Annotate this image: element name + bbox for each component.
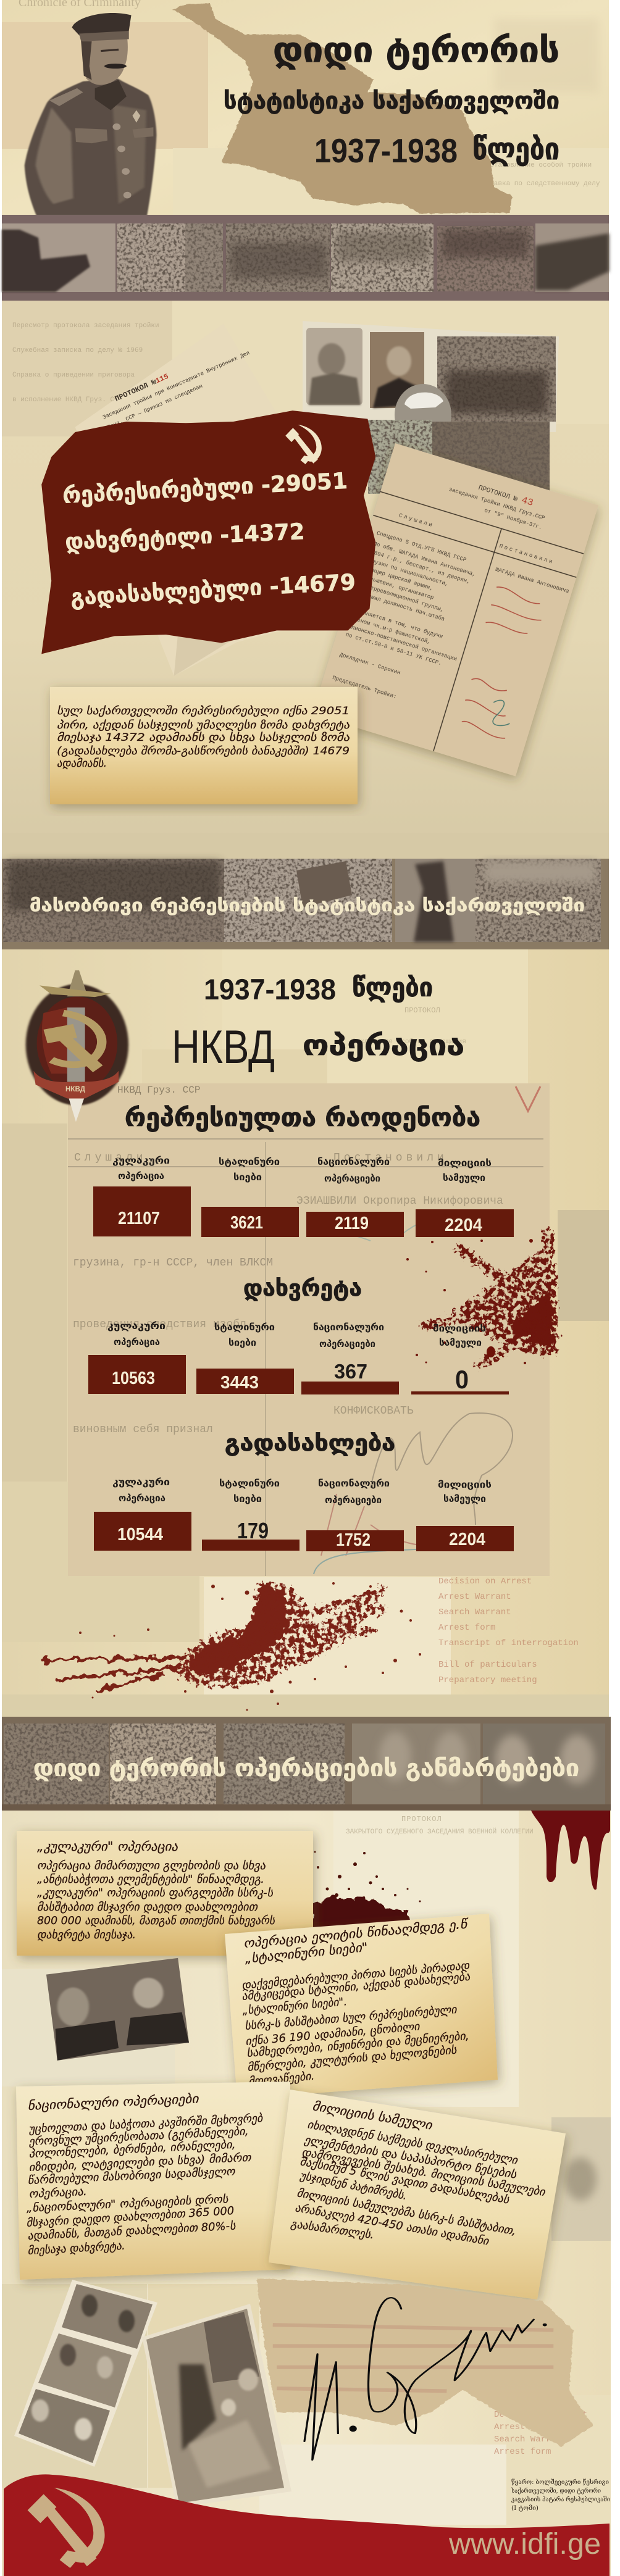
protocol text: Председатель Тройки: <box>332 675 397 700</box>
note body: დაქვემდებარებული პირთა სიებს პირადად <box>241 1959 471 1992</box>
protocol text: Обвиняется в том, что будучи <box>353 607 443 640</box>
website: www.idfi.ge <box>448 2528 601 2561</box>
note body <box>241 1959 471 2088</box>
protocol text: Слушали <box>398 512 435 529</box>
note heading: „კულაკური" ოპერაცია <box>37 1839 178 1854</box>
protocol text: меньшевик, организатор <box>362 574 435 601</box>
section 1 background: paper documents: Справка о приведении приговора <box>12 372 135 379</box>
column: national operations <box>306 1156 404 1237</box>
column: militia troika: მილიციის <box>438 1479 492 1490</box>
section 1 background: paper documents: Пересмотр протокола заседания тройки <box>12 322 159 330</box>
rotated document: protocol 115 <box>75 324 375 676</box>
column: kulak operation <box>94 1477 191 1551</box>
section 1 background: paper documents: Служебная записка по делу № 1969 <box>12 346 143 354</box>
table panel background with typed document: НКВД Груз. ССР <box>117 1085 200 1096</box>
protocol text: контрреволюционной группы, <box>360 582 445 614</box>
protocol text: Постановили <box>498 543 555 565</box>
note body: „კულაკური" ოპერაციის ფარგლებში სსრკ-ს <box>37 1886 274 1899</box>
protocol text: занимал должность Нач.штаба <box>358 590 446 623</box>
column: kulak operation: 10563 <box>112 1369 155 1388</box>
portrait of Stalin <box>25 13 157 215</box>
column: Stalin lists: სიები <box>233 1172 262 1183</box>
family photograph <box>142 2304 291 2507</box>
section 2 background: paper documents: Transcript of interrogation <box>438 1638 579 1648</box>
section 1 background: paper documents <box>2 0 609 859</box>
note body: მაქსიმუმ 5 წლის ვადით გადასახლებას <box>299 2155 511 2207</box>
protocol text: По обв. ШАГАДА Ивана Антоновича, <box>372 541 477 578</box>
mugshot photo of a woman <box>46 1958 189 2061</box>
section 2 background: paper documents: Preparatory meeting <box>438 1675 537 1685</box>
column: Stalin lists <box>196 1322 294 1394</box>
table panel background with typed document <box>68 1083 550 1576</box>
column: militia troika <box>416 1157 514 1237</box>
note body <box>26 2112 264 2257</box>
column: kulak operation <box>88 1320 186 1394</box>
section 1 background: paper documents: Постановление особой тройки <box>482 161 592 169</box>
protocol text: ШАГАДА Ивана Антоновича <box>495 567 570 595</box>
title block: სტატისტიკა საქართველოში <box>224 87 559 114</box>
section 3 background: paper documents: ЗАКРЫТОГО СУДЕБНОГО ЗАСЕДАНИЯ ВОЕННОЙ КОЛЛЕГИИ <box>346 1827 534 1836</box>
protocol text: членом чк.м-р фашистской, <box>350 615 432 646</box>
icon: hammer and sickle <box>285 425 322 464</box>
table panel background with typed document: ЭЗИАШВИЛИ Окропира Никифоровича <box>296 1195 503 1207</box>
column: militia troika: მილიციის <box>438 1157 492 1169</box>
heading: number of repressed: რეპრესიულთა რაოდენობა <box>125 1104 480 1132</box>
paper note: summary: მიესაჯა 14372 ადამიანს და სხვა სასჯელის ზომა <box>57 732 350 744</box>
column: militia troika: სამეული <box>439 1337 482 1348</box>
note body: იქნა 36 190 ადამიანი, ცნობილი <box>245 2020 421 2048</box>
photo: deported family <box>331 223 434 292</box>
dagger <box>67 970 88 996</box>
column: kulak operation: კულაკური <box>112 1155 170 1166</box>
photo: crowd with raised hands <box>226 223 330 292</box>
note body: დამრღვევების შესახებ. მილიციის სამეულები <box>301 2146 547 2199</box>
note body: „ნაციონალური" ოპერაციების დროს <box>26 2193 229 2215</box>
photo: column of prisoners <box>535 223 609 292</box>
note: national operations <box>16 2082 290 2280</box>
paper note: summary: (გადასახლება შრომა-გასწორების ბანაკებში) 14679 <box>57 745 350 757</box>
note body: ელემენტების და საპასპორტო წესების <box>303 2133 518 2182</box>
lower group photos <box>368 420 550 494</box>
section 2 background: paper documents: Arrest Warrant <box>438 1592 511 1602</box>
protocol text: по ст.ст.58-8 и 58-11 УК ГССР. <box>345 631 442 667</box>
note body: უსჯიდნენ პატიმრებს. <box>298 2169 408 2203</box>
red footer wave <box>4 2474 610 2576</box>
note body: უცხოელთა და საბჭოთა კავშირში მცხოვრებ <box>28 2112 264 2136</box>
title block: წლები <box>472 132 559 167</box>
section 3 background: paper documents: ПРОТОКОЛ <box>401 1815 442 1824</box>
collar and shoulder boards <box>95 80 127 110</box>
note body: მიესაჯა დახვრეტა. <box>27 2240 125 2257</box>
banner photos <box>3 859 601 942</box>
column: national operations: ნაციონალური <box>313 1322 384 1333</box>
column: national operations: 2119 <box>335 1214 369 1233</box>
blood splatter upper right of table <box>406 1228 557 1367</box>
source citation: კავკასიის პატარა რესპუბლიკაში <box>511 2496 610 2503</box>
photo: gunmen <box>2 223 115 292</box>
note body: 800 000 ადამიანს, მათგან თითქმის ნახევარს <box>37 1914 275 1927</box>
stat: repressed: რეპრესირებული -29051 <box>62 469 348 509</box>
section 2 background: paper documents: Заключение особого совещания <box>352 1038 466 1046</box>
section 2 background: paper documents <box>2 949 609 1717</box>
column: national operations: ნაციონალური <box>318 1478 390 1489</box>
section 3 background: paper documents: Search Warrant <box>494 2435 567 2445</box>
protocol text: шпионско-повстанческой организации <box>347 623 458 662</box>
ribbon <box>33 1071 119 1098</box>
column: kulak operation: კულაკური <box>107 1320 165 1332</box>
column: Stalin lists <box>201 1156 299 1237</box>
typed protocol document 43 <box>312 443 598 777</box>
note body: მოღვაწეები. <box>248 2070 315 2088</box>
pockets <box>75 128 107 143</box>
note body: მილიციის სამეულებმა სსრკ-ს მასშტაბით, <box>296 2186 517 2238</box>
column: kulak operation <box>93 1155 191 1236</box>
table panel background with typed document: виновным себя признал <box>73 1423 213 1436</box>
note body: ეროვნულ უმცირესობათა (გერმანელები, <box>28 2125 249 2148</box>
note heading: ნაციონალური ოპერაციები <box>27 2091 200 2113</box>
cap <box>72 13 132 37</box>
protocol 115 title: Груз. ССР — Приказ по спецделам <box>106 383 203 431</box>
column: kulak operation: ოპერაცია <box>118 1170 164 1182</box>
photo strip of mugshots <box>14 2280 157 2467</box>
blood drip top right <box>531 1811 610 1890</box>
column: Stalin lists: 179 <box>237 1518 269 1543</box>
column: national operations: ნაციონალური <box>317 1156 390 1167</box>
note body <box>290 2118 547 2248</box>
blood splatter behind notes <box>312 1851 421 1929</box>
protocol text: 1894 г.р., бессарт., из дворян, <box>370 549 471 585</box>
table panel background with typed document: Слушали <box>74 1152 147 1164</box>
column: militia troika <box>416 1479 514 1551</box>
protocol text: ПРОТОКОЛ № 43 <box>477 481 535 509</box>
note body: ადამიანს, მათგან დაახლოებით 80%-ს <box>27 2220 236 2243</box>
streaks to the left <box>43 1657 188 1690</box>
note body: ამტკიცებდა სტალინი, აქედან დასახელება <box>241 1970 471 2003</box>
section 3 background: paper documents: Decision on Arrest <box>494 2410 587 2420</box>
oval portrait <box>395 384 451 446</box>
note heading <box>243 1916 470 1966</box>
arm highlight <box>36 107 73 204</box>
stat: deported: გადასახლებული -14679 <box>70 570 356 611</box>
section 1 background: paper documents: в исполнение НКВД Груз. ССР <box>12 396 123 404</box>
paper note: summary <box>50 687 358 804</box>
title block: დიდი ტერორის <box>273 30 559 70</box>
column: militia troika: სამეული <box>443 1493 486 1504</box>
source citation: (I ტომი) <box>511 2504 538 2512</box>
column: militia troika: 2204 <box>449 1530 485 1549</box>
badge label: НКВД <box>65 1085 85 1093</box>
column: Stalin lists: სიები <box>228 1337 256 1348</box>
photo: bodies <box>117 223 223 292</box>
paper note: summary: პირი, აქედან სასჯელის უმაღლესი ზომა დახვრეტა <box>57 719 350 732</box>
note body: მსჯავრი დაედო დაახლოებით 365 000 <box>26 2204 235 2230</box>
Georgia map silhouette <box>172 3 512 214</box>
table panel background with typed document: Постановили <box>333 1152 448 1164</box>
note body: იხილავდნენ საქმეებს დეკლასირებული <box>306 2118 519 2167</box>
group photograph <box>437 336 556 422</box>
portrait 1 <box>306 328 362 405</box>
column: militia troika <box>411 1323 509 1394</box>
column: Stalin lists: 3443 <box>220 1373 259 1393</box>
head <box>81 38 128 85</box>
section 2 background: paper documents: ПРОТОКОЛ <box>404 1006 440 1015</box>
column: militia troika: მილიციის <box>433 1323 486 1334</box>
title block <box>224 30 559 170</box>
banner 3: explanation of operations <box>2 1717 611 1811</box>
tunic <box>25 78 157 215</box>
buttons <box>112 123 120 130</box>
title block: 1937-1938 <box>314 131 458 170</box>
stat: shot: დახვრეტილი -14372 <box>65 519 305 555</box>
column: kulak operation: 10544 <box>117 1525 163 1544</box>
banner photos <box>4 1724 605 1804</box>
note body: დახვრეტა მიესაჯა. <box>37 1928 136 1941</box>
banner heading: მასობრივი რეპრესიების სტატისტიკა საქართველოში <box>30 895 585 915</box>
column: Stalin lists: 3621 <box>230 1213 263 1233</box>
column: Stalin lists: სტალინური <box>219 1156 280 1167</box>
protocol text: Спецдело 5 Отд.УГБ НКВД ГССР <box>376 530 467 564</box>
blood splatter below table <box>43 1582 421 1711</box>
section 2 background: paper documents: Bill of particulars <box>438 1660 537 1670</box>
portrait 2 <box>370 332 424 408</box>
red statistics panel <box>41 411 375 654</box>
column: Stalin lists <box>202 1478 300 1551</box>
banner heading: დიდი ტერორის ოპერაციების განმარტებები <box>33 1754 579 1782</box>
droplets <box>79 1582 421 1711</box>
column: kulak operation: კულაკური <box>112 1477 170 1488</box>
protocol text: офицер царской армии, <box>365 565 434 592</box>
Stalin signature <box>304 2298 546 2460</box>
note body: მასშტაბით მსჯავრი დაედო დაახლოებით <box>37 1901 259 1914</box>
column: militia troika: სამეული <box>443 1172 485 1183</box>
column: national operations <box>301 1322 399 1394</box>
column: national operations: 367 <box>334 1360 367 1383</box>
note heading: „სტალინური სიები" <box>244 1940 369 1966</box>
protocol text: Докладчик - Сорокин <box>338 652 401 676</box>
column: national operations: 1752 <box>336 1530 371 1550</box>
table panel background with typed document: КОНФИСКОВАТЬ <box>333 1405 414 1417</box>
note body: სსრკ-ს მასშტაბით სულ რეპრესირებული <box>245 2003 458 2033</box>
note body: ოპერაცია მიმართული გლეხობის და სხვა <box>37 1859 266 1872</box>
section 2 title <box>172 972 464 1073</box>
column: national operations: ოპერაციები <box>319 1338 375 1349</box>
chest shading <box>112 105 146 204</box>
note body <box>37 1859 275 1941</box>
note body: სამხედროები, ინჟინრები და მეცნიერები, <box>246 2030 469 2060</box>
section 2 background: paper documents: Arrest form <box>438 1623 495 1633</box>
note: kulak operation <box>17 1831 313 1956</box>
note: Stalin lists <box>225 1914 498 2099</box>
source citation: წყარო: ბოლშევიკური წესრიგი <box>511 2478 609 2486</box>
note body: წარმოებული მასობრივი სადამსჯელო <box>27 2165 237 2187</box>
blood droplets upper right <box>406 1233 545 1364</box>
note heading: მილიციის სამეული <box>311 2098 434 2133</box>
note body: მწერლები, კულტურის და ხელოვნების <box>247 2044 458 2074</box>
section 2 title: 1937-1938 <box>204 973 336 1006</box>
note body: „ანტისაბჭოთა ელემენტების" წინააღმდეგ. <box>37 1873 264 1886</box>
source citation: საქართველოში, დიდი ტერორი <box>511 2487 601 2495</box>
table: repressed count <box>93 1104 514 1237</box>
column: militia troika: 2204 <box>445 1215 482 1235</box>
НКВД: НКВД <box>172 1021 275 1073</box>
banner 2: mass repression statistics <box>2 859 609 949</box>
note body: „სტალინური სიები". <box>242 1995 348 2017</box>
operation: ოპერაცია <box>303 1028 464 1062</box>
note body: იზიდები, ლატვიელები და სხვა) მიმართ <box>28 2151 252 2174</box>
column: Stalin lists: სტალინური <box>219 1478 280 1489</box>
badge oval <box>26 984 128 1106</box>
section 2 title: წლები <box>352 972 433 1002</box>
NKVD badge <box>26 970 128 1122</box>
column: national operations: ოპერაციები <box>325 1494 382 1506</box>
icon: hammer and sickle <box>28 2488 105 2568</box>
note body: გაასამართლეს. <box>290 2217 375 2241</box>
old man photo at right edge <box>551 2117 611 2241</box>
note heading: ოპერაცია ელიტის წინააღმდეგ ე.წ <box>243 1916 470 1951</box>
column: Stalin lists: სტალინური <box>214 1322 275 1333</box>
protocol text: грузин по национальности, <box>367 557 449 588</box>
section 2 background: paper documents: Decision on Arrest <box>438 1577 532 1586</box>
column: Stalin lists: სიები <box>233 1493 262 1504</box>
column: militia troika: 0 <box>455 1365 469 1394</box>
photo card with portraits <box>303 321 559 494</box>
protocol text <box>332 457 592 740</box>
red handwriting <box>455 586 547 740</box>
section 2 background: paper documents: Search Warrant <box>438 1607 511 1617</box>
protocol text: от "9" Ноября-37г. <box>484 507 543 531</box>
table panel background with typed document: проведения следствия изобл. <box>73 1318 253 1331</box>
source citation <box>511 2478 610 2512</box>
section 3 background: paper documents <box>2 1811 611 2576</box>
column: national operations: ოპერაციები <box>324 1173 380 1184</box>
heading: deportation: გადასახლება <box>225 1431 395 1456</box>
column: kulak operation: ოპერაცია <box>114 1336 160 1348</box>
column: kulak operation: ოპერაცია <box>119 1493 165 1504</box>
map of Georgia filled with archival documents <box>257 2278 593 2447</box>
note body: არანაკლებ 420-450 ათასი ადამიანი <box>294 2201 491 2248</box>
note body: პოლონელები, ბერძნები, ირანელები, <box>28 2138 236 2161</box>
note: militia troikas <box>269 2090 566 2299</box>
protocol 115 title: Заседания тройки при Комиссариате Внутренних Дел <box>102 350 251 420</box>
column: national operations <box>306 1478 404 1551</box>
table: deportation <box>94 1431 514 1551</box>
photo: group portrait <box>437 226 534 291</box>
heading: execution: დახვრეტა <box>243 1276 362 1301</box>
protocol 115 title: ПРОТОКОЛ №115 <box>114 372 170 404</box>
section 3 background: paper documents: Arrest Warrant <box>494 2422 567 2432</box>
paper note: summary: ადამიანს. <box>57 757 107 770</box>
table panel background with typed document: грузина, гр-н СССР, член ВЛКСМ <box>73 1257 273 1269</box>
paper note: summary: სულ საქართველოში რეპრესირებული იქნა 29051 <box>57 705 350 717</box>
note body: ოპერაცია. <box>28 2185 87 2201</box>
column: kulak operation: 21107 <box>118 1209 160 1228</box>
section 1 background: paper documents: Справка по следственному делу <box>482 180 600 188</box>
table: executions <box>88 1276 509 1394</box>
star <box>132 110 140 123</box>
hammer and sickle <box>40 985 111 997</box>
photo band 1 <box>2 215 609 301</box>
section 3 background: paper documents: Arrest form <box>494 2447 551 2457</box>
protocol text: заседания Тройки НКВД Груз.ССР <box>448 486 545 522</box>
